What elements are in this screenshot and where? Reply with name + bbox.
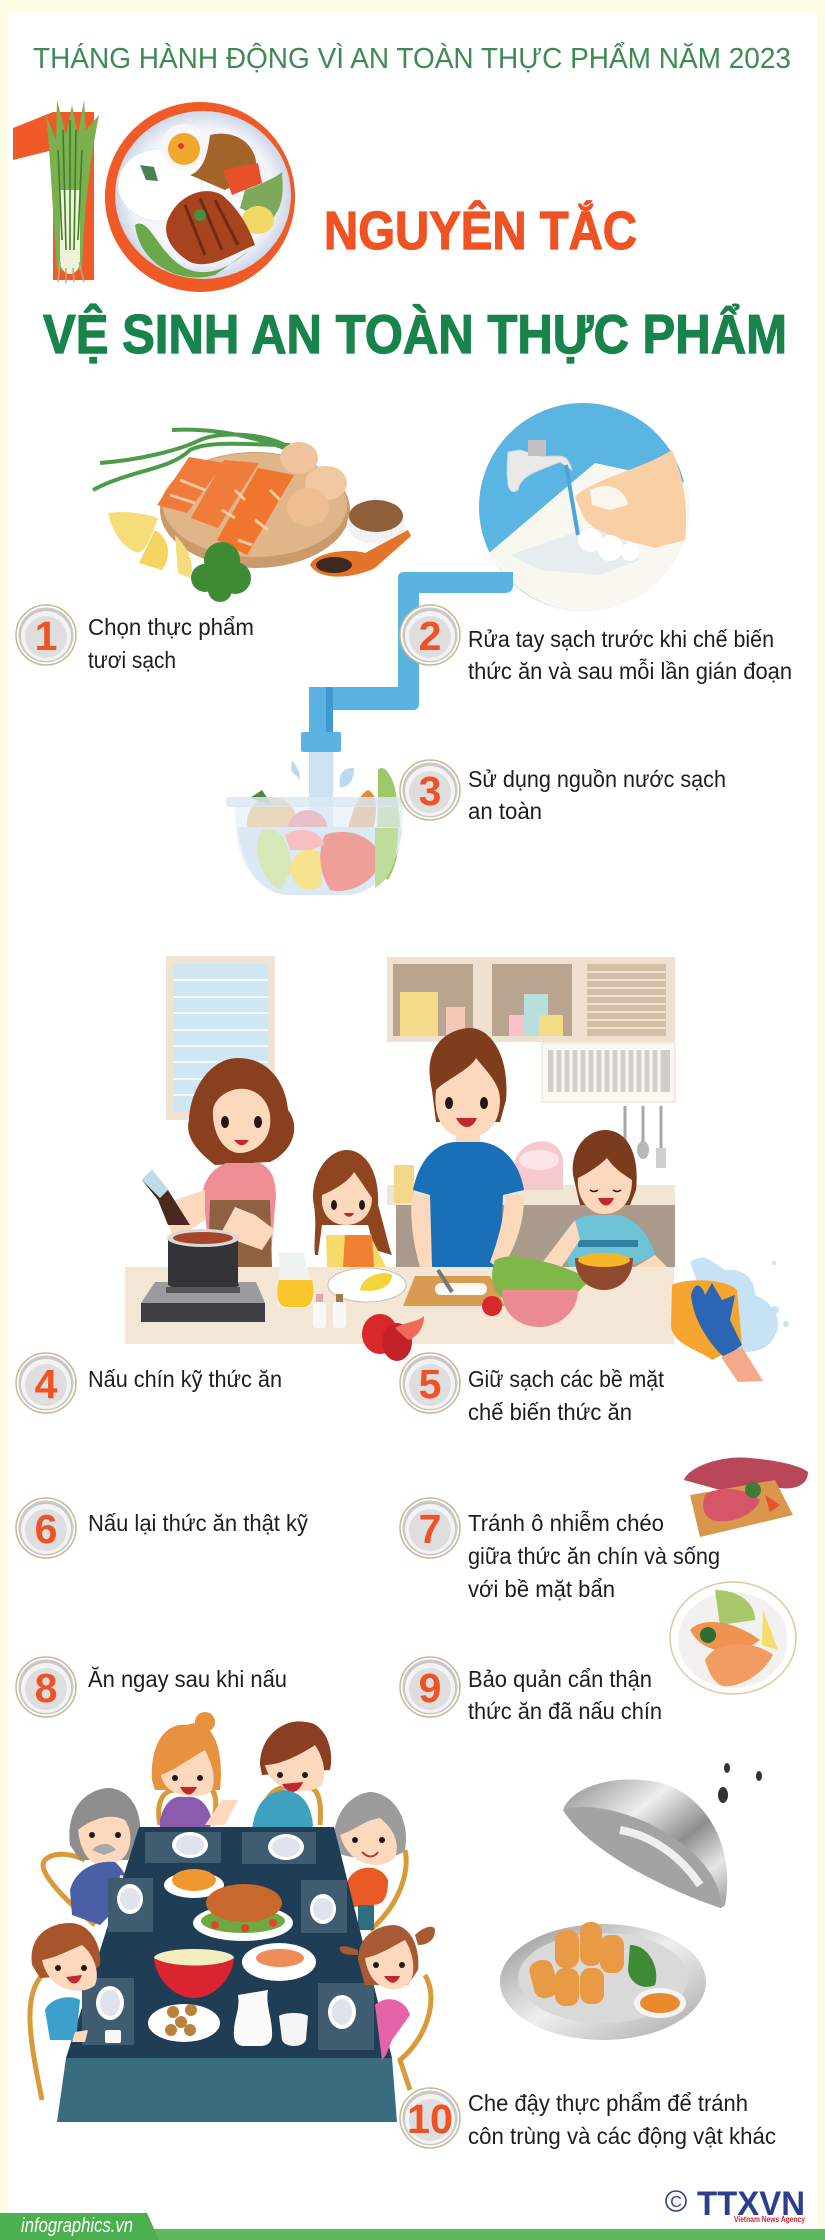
illustration: hand washing circle [479, 403, 690, 611]
text 10: Che đậy thực phẩm để tránh [468, 2090, 748, 2116]
girl at table [340, 1925, 435, 2060]
text 10 [468, 2090, 776, 2149]
big number 10 with food [13, 100, 295, 292]
parsley [191, 542, 251, 602]
illustration: cleaning glove [671, 1258, 789, 1382]
badge 2 [400, 605, 460, 665]
blue background [479, 403, 687, 611]
jar [394, 1165, 414, 1203]
plate: noodles [190, 134, 256, 190]
illustration: food cover dome [500, 1763, 762, 2040]
digit 0 plate ring [105, 102, 295, 292]
milk pitcher [234, 1990, 272, 2046]
badge 3 [400, 760, 460, 820]
plate: pineapple [242, 206, 274, 234]
text 1 [88, 614, 254, 673]
badge 4 [16, 1353, 76, 1413]
water stream [309, 752, 333, 830]
logo: TTXVN: Vietnam News Agency [734, 2215, 805, 2224]
cupcake plate [148, 2004, 220, 2042]
roast turkey [193, 1884, 293, 1941]
text 1: Chọn thực phẩm [88, 614, 254, 640]
produce in water [257, 829, 292, 890]
illustration: raw meat on board [684, 1457, 808, 1537]
place settings [82, 1832, 374, 2050]
tomatoes [362, 1296, 502, 1361]
foam [690, 1258, 778, 1352]
arm [721, 1347, 763, 1382]
badge 9 [400, 1657, 460, 1717]
text 2 [468, 626, 792, 684]
eggs [280, 442, 318, 474]
badge 1: 1 [35, 613, 57, 659]
badge 3: 3 [419, 768, 441, 814]
spoon with pepper [310, 530, 411, 577]
logo: TTXVN: C [670, 2194, 682, 2211]
badge 1 [16, 605, 76, 665]
text 3: Sử dụng nguồn nước sạch [468, 766, 726, 792]
hands [575, 450, 686, 548]
father [411, 1028, 524, 1270]
top-left woman [152, 1712, 238, 1828]
wooden board [160, 452, 350, 568]
cutting board with knife [403, 1270, 505, 1306]
red soup bowl [154, 1949, 234, 1998]
logo: TTXVN: TTXVN [697, 2185, 805, 2223]
water [566, 465, 578, 535]
text 6: Nấu lại thức ăn thật kỹ [88, 1510, 308, 1536]
plate: grilled pork [166, 191, 255, 264]
dome [563, 1779, 727, 1908]
text 9 [468, 1666, 662, 1724]
text 5: Giữ sạch các bề mặt [468, 1366, 665, 1392]
illustration: fresh food on board [93, 430, 411, 602]
lemon plate [328, 1268, 406, 1302]
text 8: Ăn ngay sau khi nấu [88, 1666, 287, 1692]
spring rolls [527, 1922, 624, 2006]
herb leaves [628, 1945, 656, 1987]
badge 10 [400, 2088, 460, 2148]
plate: cucumber [240, 172, 283, 222]
chicken-nuggets plate [164, 1869, 224, 1898]
badge 6: 6 [35, 1506, 57, 1552]
plate [115, 111, 291, 279]
chairs [30, 1785, 431, 2100]
juice jug [277, 1253, 314, 1308]
icon: spring onion [46, 100, 99, 283]
text 7: với bề mặt bẩn [468, 1576, 615, 1602]
plate: rice [118, 149, 202, 221]
rice cooker [515, 1141, 563, 1190]
water pipe [301, 572, 513, 752]
text 1: tươi sạch [88, 647, 176, 673]
text 4: Nấu chín kỹ thức ăn [88, 1366, 282, 1392]
title: campaign heading: THÁNG HÀNH ĐỘNG VÌ AN TOÀN THỰC PHẨM NĂM 2023 [33, 41, 791, 75]
salmon slices [157, 457, 224, 513]
badge 4: 4 [35, 1361, 58, 1407]
table top [66, 1827, 392, 2058]
illustration: family cooking in kitchen [125, 956, 675, 1361]
top-right man [252, 1721, 331, 1836]
lemons [108, 512, 158, 552]
table skirt [57, 2058, 397, 2122]
mother [142, 1058, 294, 1267]
plate: lettuce [135, 224, 250, 278]
badge 7: 7 [419, 1506, 441, 1552]
footer tab with site name: infographics.vn [21, 2215, 133, 2237]
footer green band [0, 2229, 825, 2240]
girl [313, 1150, 392, 1267]
spring onions [93, 430, 290, 490]
salt and pepper [313, 1294, 346, 1328]
illustration: cooked salmon plate [670, 1582, 796, 1694]
text 2: thức ăn và sau mỗi lần gián đoạn [468, 658, 792, 684]
plate: wedge [223, 163, 262, 195]
salmon plate [242, 1943, 316, 1981]
grandmother [334, 1792, 406, 1930]
nut bowl [347, 504, 405, 544]
illustration: family dinner table [30, 1712, 435, 2122]
text 7: giữa thức ăn chín và sống [468, 1543, 720, 1569]
illustration: washing bowl [226, 768, 406, 895]
water splash [291, 760, 354, 788]
text 2: Rửa tay sạch trước khi chế biến [468, 626, 774, 652]
yellow batter bowl [575, 1253, 633, 1290]
grandfather [69, 1788, 140, 1925]
heading: NGUYÊN TẮC: NGUYÊN TẮC [324, 200, 637, 261]
dish rack [542, 1043, 675, 1168]
badge 6 [16, 1498, 76, 1558]
text 9: thức ăn đã nấu chín [468, 1698, 662, 1724]
window [166, 956, 275, 1120]
text 9: Bảo quản cẩn thận [468, 1666, 652, 1692]
sink [489, 463, 690, 611]
flies [718, 1763, 762, 1803]
vegetables [372, 768, 400, 880]
badge 2: 2 [419, 613, 441, 659]
serving tray [500, 1924, 706, 2040]
text 7: Tránh ô nhiễm chéo [468, 1510, 664, 1536]
text 3: an toàn [468, 798, 542, 824]
text 10: côn trùng và các động vật khác [468, 2123, 776, 2149]
badge 7 [400, 1498, 460, 1558]
bowl rim [226, 797, 406, 807]
tap [507, 450, 572, 492]
kitchen counter [125, 1267, 674, 1344]
badge 5: 5 [419, 1361, 441, 1407]
badge 9: 9 [419, 1665, 441, 1711]
plate: sauce bowl [161, 124, 207, 170]
digit 1 [13, 112, 94, 280]
soap foam [578, 528, 639, 561]
sauce dish [634, 1988, 686, 2018]
footer tab with site name [0, 2213, 159, 2240]
badge 8: 8 [35, 1665, 57, 1711]
text 3 [468, 766, 726, 824]
cooking pot on stove [141, 1229, 265, 1322]
badge 5 [400, 1353, 460, 1413]
cups [279, 2013, 308, 2046]
text 5: chế biến thức ăn [468, 1399, 632, 1425]
salad bowl [492, 1256, 590, 1327]
text 7 [468, 1510, 720, 1602]
boy at table [32, 1923, 100, 2042]
bowl with water [235, 806, 403, 895]
boy [542, 1130, 668, 1280]
badge 10: 10 [407, 2096, 453, 2142]
text 5 [468, 1366, 665, 1425]
pipe nozzle [301, 732, 341, 752]
badge 8 [16, 1657, 76, 1717]
back counter [387, 1185, 675, 1205]
wall cabinets [387, 957, 675, 1042]
sponge cloth [671, 1280, 742, 1360]
blue glove [691, 1283, 742, 1358]
